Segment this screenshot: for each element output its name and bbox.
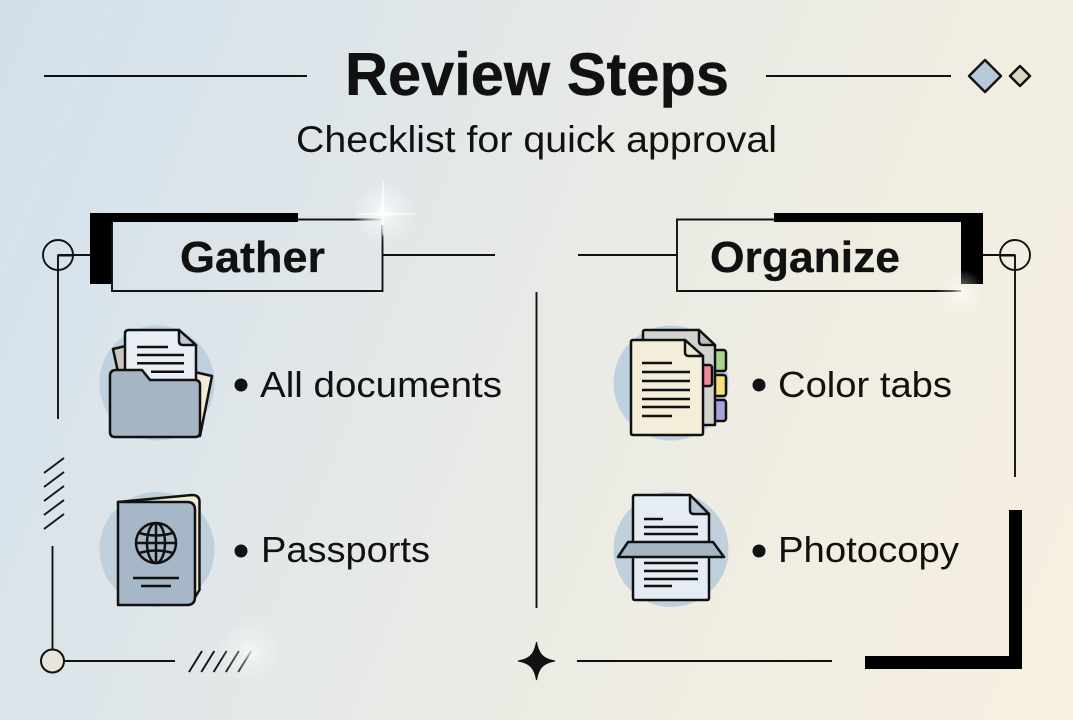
title rule: left	[44, 75, 307, 77]
center divider	[536, 292, 538, 608]
panel: Organize header	[578, 213, 1030, 477]
icon: large diamond	[969, 60, 1001, 92]
panel: Gather header	[43, 213, 495, 419]
bottom rule	[577, 660, 832, 662]
icon: folder with documents	[100, 326, 214, 440]
heading: Gather: Gather	[180, 233, 325, 282]
lower left bracket	[41, 546, 175, 672]
icon: photocopy scanner	[614, 492, 728, 607]
list item: Photocopy: Photocopy	[778, 529, 959, 570]
glow: top of Gather box	[351, 180, 416, 245]
title rule: right	[766, 75, 951, 77]
glow: Organize box corner	[936, 269, 984, 317]
list item: Color tabs: Color tabs	[778, 364, 952, 405]
globe	[136, 523, 176, 563]
icon: passport	[100, 492, 214, 607]
glow: bottom hatch	[216, 618, 284, 686]
list item: Passports: Passports	[261, 529, 430, 570]
hatch marks: bottom	[189, 651, 251, 672]
thick corner bracket	[865, 510, 1022, 669]
heading: Organize: Organize	[710, 233, 900, 282]
icon: four-point star	[518, 642, 555, 680]
hatch marks: left	[44, 458, 64, 529]
title: Review Steps	[345, 41, 729, 108]
list item: All documents: All documents	[260, 364, 502, 405]
icon: documents with color tabs	[614, 326, 728, 440]
subtitle: Checklist for quick approval	[296, 119, 777, 160]
icon: small diamond	[1010, 66, 1030, 86]
